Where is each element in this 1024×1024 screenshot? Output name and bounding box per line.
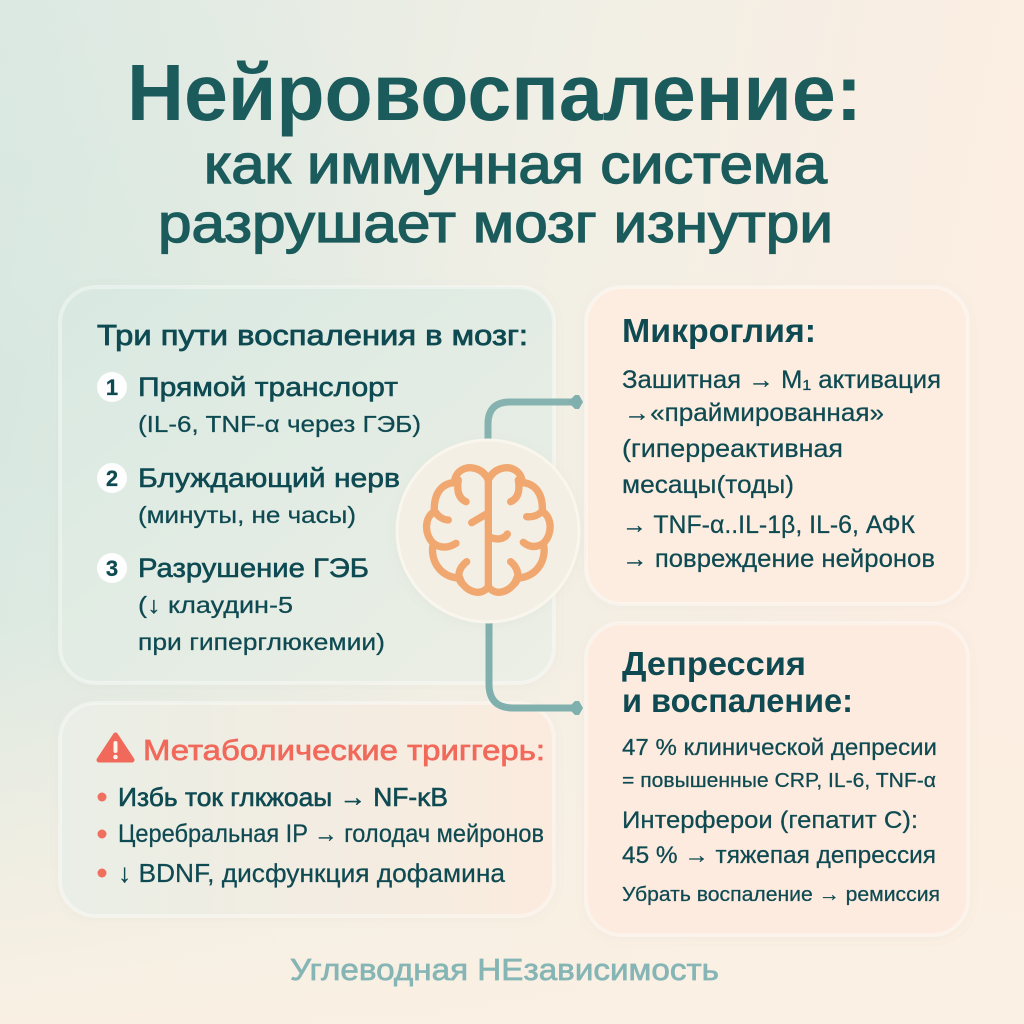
panel: three pathways xyxy=(60,287,554,683)
heading: depression: и воспаление: xyxy=(622,682,853,719)
arrow: brain to microglia xyxy=(488,395,583,445)
icon: warning xyxy=(99,735,132,760)
microglia text: (гиперреактивная xyxy=(622,435,843,463)
depression text: = повышенные CRP, IL-6, TNF-α xyxy=(622,770,936,792)
footer brand: Углеводная НЕзависимость xyxy=(290,952,719,987)
depression text: Интерферои (гепатит С): xyxy=(622,807,918,834)
pathway 3: (↓ клаудин-5 xyxy=(138,592,293,618)
pathway 1 xyxy=(97,372,421,437)
trigger 2: Церебральная IP → голодач мейронов xyxy=(118,820,544,848)
title: как иммунная система xyxy=(204,133,827,195)
pathway 3: 3 xyxy=(106,556,118,581)
heading: metabolic triggers: Метаболические триггерь: xyxy=(143,735,545,767)
pathway 1: Прямой транслорт xyxy=(138,372,398,402)
depression text: 47 % клинической депресии xyxy=(622,734,937,760)
heading: depression xyxy=(622,645,853,719)
heading: depression: Депрессия xyxy=(622,645,806,682)
microglia text: →«праймированная» xyxy=(624,399,884,427)
trigger 3: ↓ BDNF, дисфункция дофамина xyxy=(118,858,506,888)
pathway 1: (IL-6, TNF-α через ГЭБ) xyxy=(138,411,421,437)
title: разрушает мозг изнутри xyxy=(158,192,833,254)
pathway 3: при гиперглюкемии) xyxy=(138,629,385,655)
pathway 3 xyxy=(97,553,385,655)
panel: microglia xyxy=(586,287,968,604)
pathway 2: Блуждающий нерв xyxy=(138,463,400,493)
arrow: brain to depression xyxy=(489,618,583,715)
icon: brain in circle xyxy=(397,440,579,622)
microglia text xyxy=(622,366,941,573)
depression text: Убрать воспаление → ремиссия xyxy=(622,884,940,906)
pathway 2 xyxy=(97,463,400,528)
panel: metabolic triggers xyxy=(60,703,554,916)
panel: depression and inflammation xyxy=(586,623,968,935)
pathway 2: (минуты, не часы) xyxy=(138,502,356,528)
microglia text: месацы(тоды) xyxy=(622,471,794,499)
pathway 3: Разрушение ГЭБ xyxy=(138,553,369,583)
depression text xyxy=(622,734,940,906)
heading: microglia: Микроглия: xyxy=(622,312,816,349)
trigger 1: Избь ток глкжоаы → NF-κB xyxy=(118,782,448,812)
title xyxy=(127,48,862,254)
microglia text: → TNF-α..IL-1β, IL-6, АФК xyxy=(622,511,915,539)
pathway 1: 1 xyxy=(106,375,118,400)
heading: three pathways: Три пути воспаления в мозг: xyxy=(97,320,528,352)
microglia text: Зашитная → M₁ активация xyxy=(622,366,941,394)
microglia text: → повреждение нейронов xyxy=(622,545,935,573)
depression text: 45 % → тяжепая депрессия xyxy=(622,842,936,869)
pathway 2: 2 xyxy=(106,466,118,491)
title: Нейровоспаление: xyxy=(127,48,862,137)
